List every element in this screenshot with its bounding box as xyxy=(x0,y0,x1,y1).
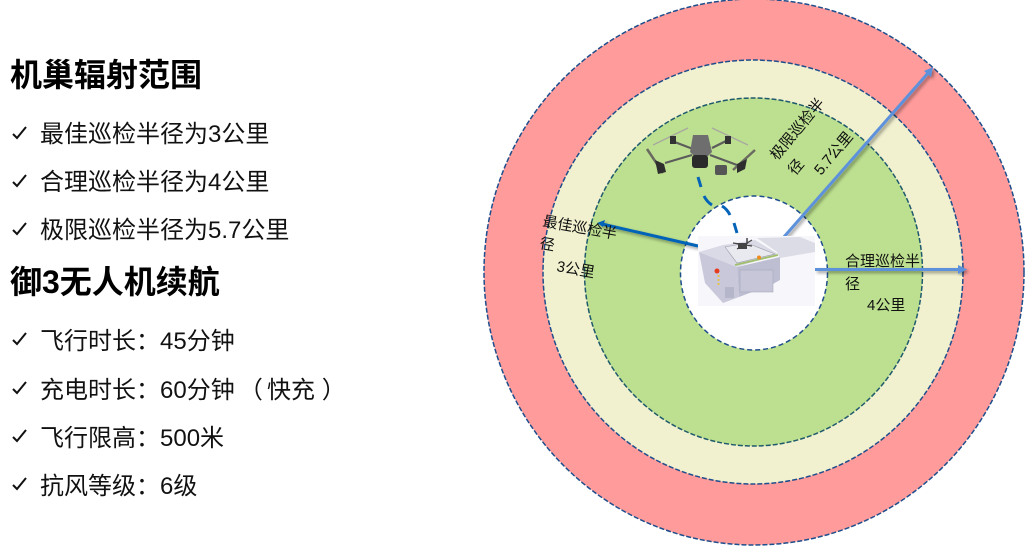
green circle: best range xyxy=(584,98,922,446)
arrow: best radius xyxy=(597,220,698,246)
label: best radius: 3公里 xyxy=(555,258,596,282)
item: limit radius: 极限巡检半径为5.7公里 xyxy=(40,217,289,244)
inner circle: nest xyxy=(680,196,828,350)
label: reasonable radius xyxy=(845,253,920,314)
item: best radius: 最佳巡检半径为3公里 xyxy=(40,121,269,148)
item: wind resistance: 抗风等级：6级 xyxy=(40,466,197,501)
label: best radius: 最佳巡检半 xyxy=(541,213,618,243)
item: altitude limit: 飞行限高：500米 xyxy=(40,418,224,453)
label: reasonable radius: 径 xyxy=(845,276,860,293)
item: flight time: 飞行时长：45分钟 xyxy=(40,321,235,356)
middle circle: reasonable range xyxy=(543,60,963,484)
label: limit radius: 极限巡检半 xyxy=(767,95,828,164)
item: reasonable radius: 合理巡检半径为4公里 xyxy=(40,169,269,196)
dashed flight path xyxy=(698,177,737,233)
label: reasonable radius: 4公里 xyxy=(867,297,905,314)
label: best radius: 径 xyxy=(538,235,556,255)
arrow: limit radius xyxy=(783,67,933,238)
arrow: reasonable radius xyxy=(815,265,967,274)
label: limit radius: 5.7公里 xyxy=(811,129,857,179)
label: best radius xyxy=(538,213,618,282)
label: limit radius: 径 xyxy=(785,156,808,179)
item: charge time: 充电时长：60分钟 （ 快充 ） xyxy=(40,370,346,405)
outer circle: limit range xyxy=(484,0,1024,545)
label: limit radius xyxy=(767,95,857,179)
icon: drone xyxy=(647,128,755,175)
icon: nest machine xyxy=(698,236,815,306)
label: reasonable radius: 合理巡检半 xyxy=(845,253,920,270)
heading: drone endurance: 御3无人机续航 xyxy=(10,264,220,300)
heading: nest range: 机巢辐射范围 xyxy=(10,57,202,93)
